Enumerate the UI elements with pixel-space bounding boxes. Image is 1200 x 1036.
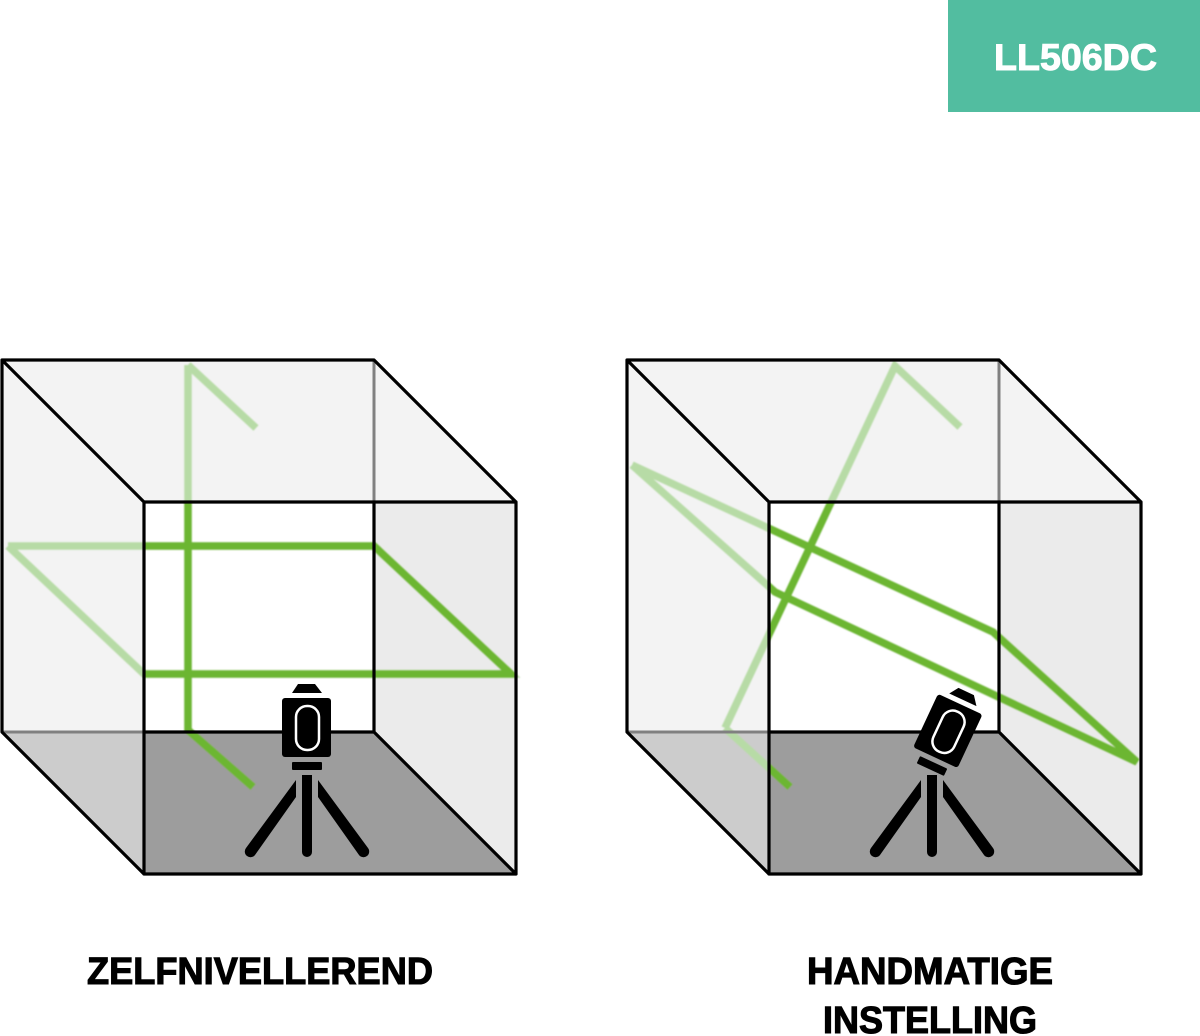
panel: manual setting cube	[627, 360, 1141, 874]
heading: manual setting	[807, 951, 1053, 1036]
cube faces	[627, 360, 1141, 874]
laser lines, level	[8, 365, 511, 787]
icon: tripod	[245, 775, 369, 857]
panel: self-levelling cube	[2, 360, 516, 874]
icon: laser level	[282, 684, 331, 770]
badge: model number	[948, 0, 1200, 112]
icon: tripod	[870, 775, 994, 857]
cube faces	[2, 360, 516, 874]
heading: manual setting: HANDMATIGE	[807, 951, 1053, 993]
icon: tilted laser level	[908, 681, 988, 780]
laser lines, tilted	[632, 366, 1137, 787]
cube edges	[627, 360, 1141, 874]
cube edges	[2, 360, 516, 874]
heading: self-levelling: ZELFNIVELLEREND	[87, 951, 433, 993]
badge: model number: LL506DC	[994, 37, 1157, 78]
